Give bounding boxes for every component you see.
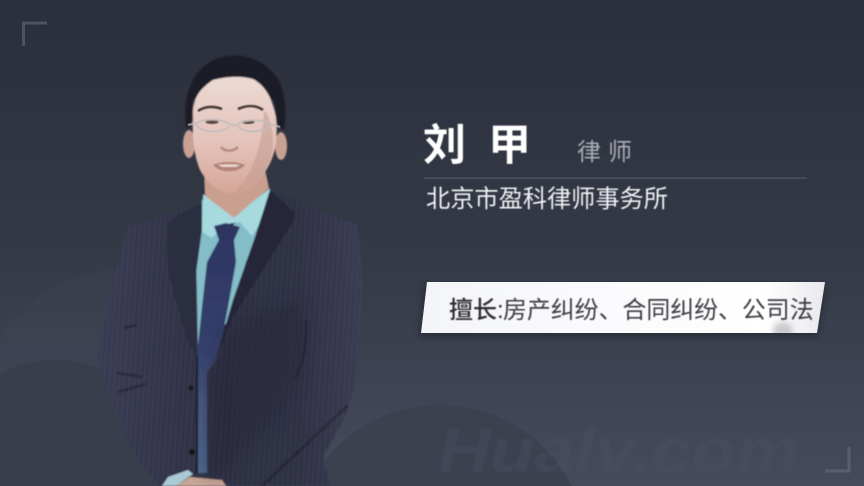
eyes	[206, 120, 254, 124]
corner bracket: bottom right	[825, 447, 849, 471]
divider	[424, 178, 807, 179]
necktie	[197, 223, 240, 473]
specialty list: 房产纠纷、合同纠纷、公司法	[503, 297, 814, 324]
name: 刘	[423, 122, 466, 170]
collar	[202, 188, 270, 238]
nose	[221, 147, 238, 151]
body	[97, 55, 362, 486]
jacket buttons	[188, 386, 195, 455]
glasses	[188, 120, 280, 132]
shirt cuff and hand	[162, 470, 226, 486]
face	[193, 77, 277, 193]
job title	[577, 139, 632, 166]
neck	[204, 165, 269, 218]
hair	[185, 55, 285, 130]
decorative circles	[0, 270, 572, 486]
facial features	[188, 106, 280, 171]
banner shadow	[418, 285, 826, 337]
specialty banner	[418, 282, 826, 340]
law firm: 北京市盈科律师事务所	[426, 186, 668, 213]
job title: 律	[577, 139, 601, 166]
corner bracket: top left	[24, 23, 47, 46]
left lapel	[167, 203, 202, 357]
right lapel	[215, 190, 295, 362]
jacket shadow	[208, 300, 305, 480]
job title: 师	[608, 139, 632, 166]
specialty label: 擅长:	[449, 297, 504, 324]
banner background	[421, 282, 825, 333]
name	[423, 122, 531, 170]
mouth	[213, 162, 245, 171]
face shading	[234, 112, 273, 193]
sleeve creases	[117, 320, 348, 486]
eyebrows	[198, 106, 263, 111]
ears	[183, 130, 287, 160]
watermark: Hualv.com	[438, 417, 800, 486]
jacket	[97, 190, 362, 486]
name: 甲	[488, 122, 531, 170]
portrait of the lawyer	[97, 55, 362, 486]
banner highlight	[770, 320, 795, 333]
shirt	[196, 189, 270, 350]
left front edge	[196, 355, 198, 473]
